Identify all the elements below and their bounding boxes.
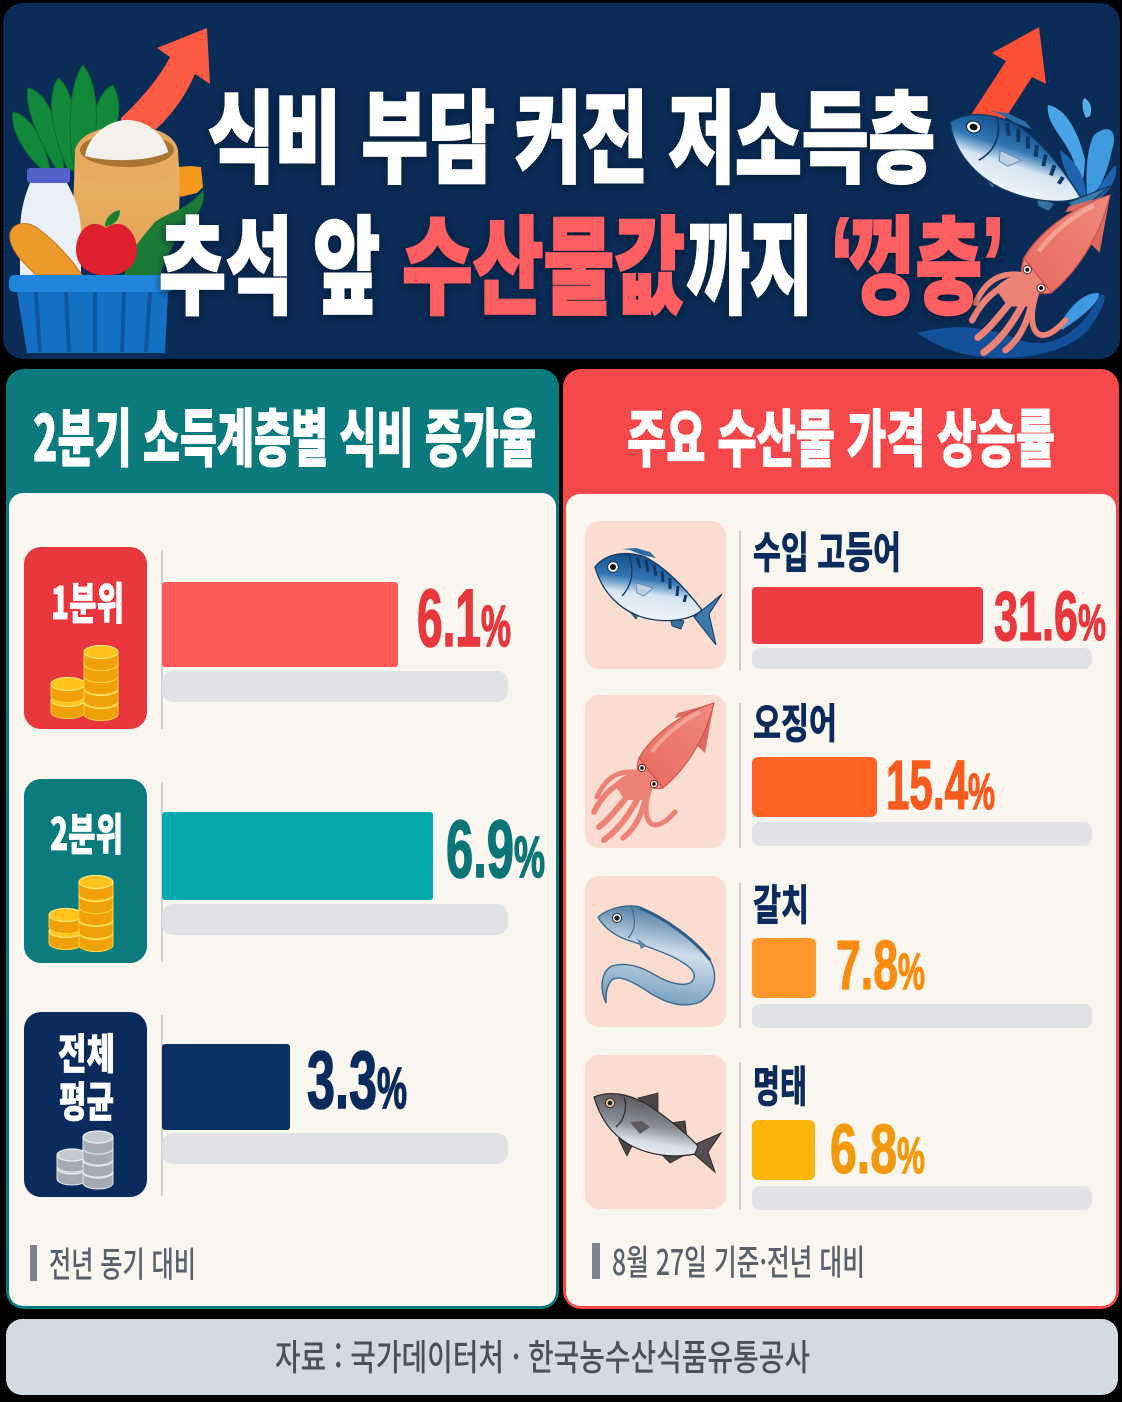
icon: gold coins [49,876,113,952]
icon card [585,1055,726,1209]
icon: grocery basket [9,65,204,353]
value: % [897,1127,925,1184]
bar [162,812,433,900]
title line 2: ’ [980,187,1006,344]
icon: pollock [594,1093,721,1172]
icon card [585,876,726,1027]
bar [752,587,983,644]
value: % [898,943,925,1000]
row: 수입 고등어 [585,519,1106,670]
badge: 전체 [58,1021,115,1082]
label: 명태 [753,1053,807,1115]
heading: 2분기 소득계층별 식비 증가율 [33,389,536,480]
value: % [514,825,545,890]
row: 갈치 [585,872,1092,1028]
note [592,1235,865,1286]
icon: hairtail [598,906,715,1005]
bar [752,1120,815,1180]
icon: squid [972,195,1110,352]
bar track [162,671,508,702]
bar [162,582,398,667]
icon: mackerel [595,548,722,645]
icon: silver coins [57,1131,113,1189]
icon: squid [594,703,714,840]
arrow: rising price right [971,27,1046,122]
note: 전년 동기 대비 [49,1237,196,1288]
label: 갈치 [753,872,809,933]
badge [24,1012,147,1197]
badge: 2분위 [50,799,123,863]
value: 15.4 [886,746,968,824]
panel: income group food spending [6,369,559,1309]
title line 2: ‘ [829,187,855,344]
badge [24,779,147,963]
bar [162,1044,290,1130]
bar track [752,648,1092,669]
value: % [968,763,995,820]
value: 6.8 [830,1110,897,1188]
value: 6.9 [446,804,514,895]
icon card [585,521,726,669]
note: 8월 27일 기준·전년 대비 [612,1235,865,1286]
value: % [1078,594,1106,651]
title line 2: 수산물값 [402,182,685,336]
bar track [752,1004,1092,1028]
icon: gold coins [51,646,118,720]
title [159,58,1006,344]
row: 명태 [585,1053,1092,1210]
row: 오징어 [585,690,1092,848]
panel: title banner [3,3,1121,359]
label: 오징어 [753,690,837,750]
title line 2: 까지 [687,182,813,336]
row: 2분위 [24,779,545,963]
bar track [752,822,1092,846]
icon: water splash [917,98,1116,358]
row: 1분위 [24,547,511,729]
bar track [162,1133,508,1164]
label: 수입 고등어 [753,519,901,581]
bar track [162,904,508,935]
badge: 평균 [59,1069,114,1130]
row: 전체 평균 [24,1012,508,1197]
title line 2: 껑충 [849,182,982,336]
source footer: 자료 : 국가데이터처 · 한국농수산식품유통공사 [275,1329,810,1381]
value: 7.8 [836,926,898,1004]
bar [752,757,877,817]
title line 2 [159,182,1006,344]
bar track [752,1186,1092,1210]
value: % [377,1056,407,1121]
icon: mackerel [932,102,1121,240]
badge [24,547,147,729]
badge: 1분위 [51,568,124,632]
value: % [481,594,511,659]
arrow: rising price left [121,28,210,130]
source footer [6,1319,1118,1395]
bar [752,938,816,998]
note [30,1237,196,1288]
value: 6.1 [417,573,481,664]
title line 2: 추석 앞 [159,182,380,336]
panel: seafood price increases [563,369,1119,1309]
icon card [585,695,726,848]
value: 3.3 [307,1035,377,1126]
